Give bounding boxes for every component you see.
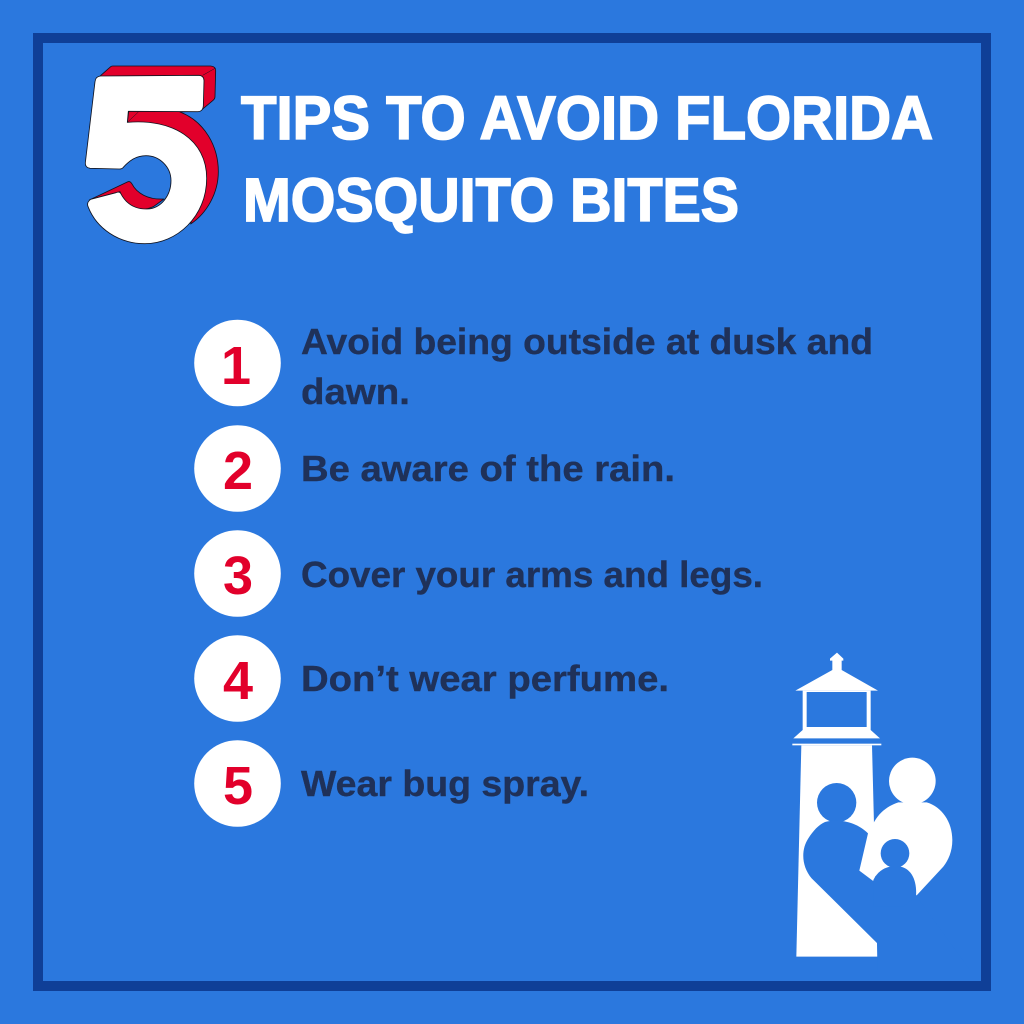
gallery rail	[792, 744, 881, 745]
list item 4: 4	[223, 651, 253, 711]
list item 1: 1	[221, 336, 251, 396]
list item 4	[194, 635, 669, 722]
icon: lighthouse and family logo	[792, 653, 970, 970]
list item 1	[194, 320, 873, 412]
list item 2	[194, 425, 675, 512]
list item 5: 5	[223, 756, 253, 816]
list item 3: Cover your arms and legs.	[301, 554, 763, 595]
icon: 3D number five	[85, 66, 218, 244]
tower	[796, 745, 877, 957]
list item 5: Wear bug spray.	[301, 763, 589, 804]
list item 2: Be aware of the rain.	[301, 448, 675, 489]
title	[241, 84, 933, 234]
title: TIPS TO AVOID FLORIDA	[241, 84, 933, 152]
list item 3: 3	[223, 546, 253, 606]
list item 1: Avoid being outside at dusk and	[301, 321, 873, 362]
lighthouse roof	[795, 653, 878, 691]
lantern room	[793, 691, 880, 738]
parent figure right	[889, 758, 936, 804]
list item 2: 2	[223, 441, 253, 501]
list item 4: Don’t wear perfume.	[301, 658, 669, 699]
list item 1: dawn.	[301, 371, 410, 412]
child figure	[881, 839, 909, 868]
title: MOSQUITO BITES	[243, 166, 739, 234]
list item 3	[194, 530, 763, 617]
list item 5	[194, 740, 589, 827]
parent figure left, blue	[817, 783, 856, 822]
